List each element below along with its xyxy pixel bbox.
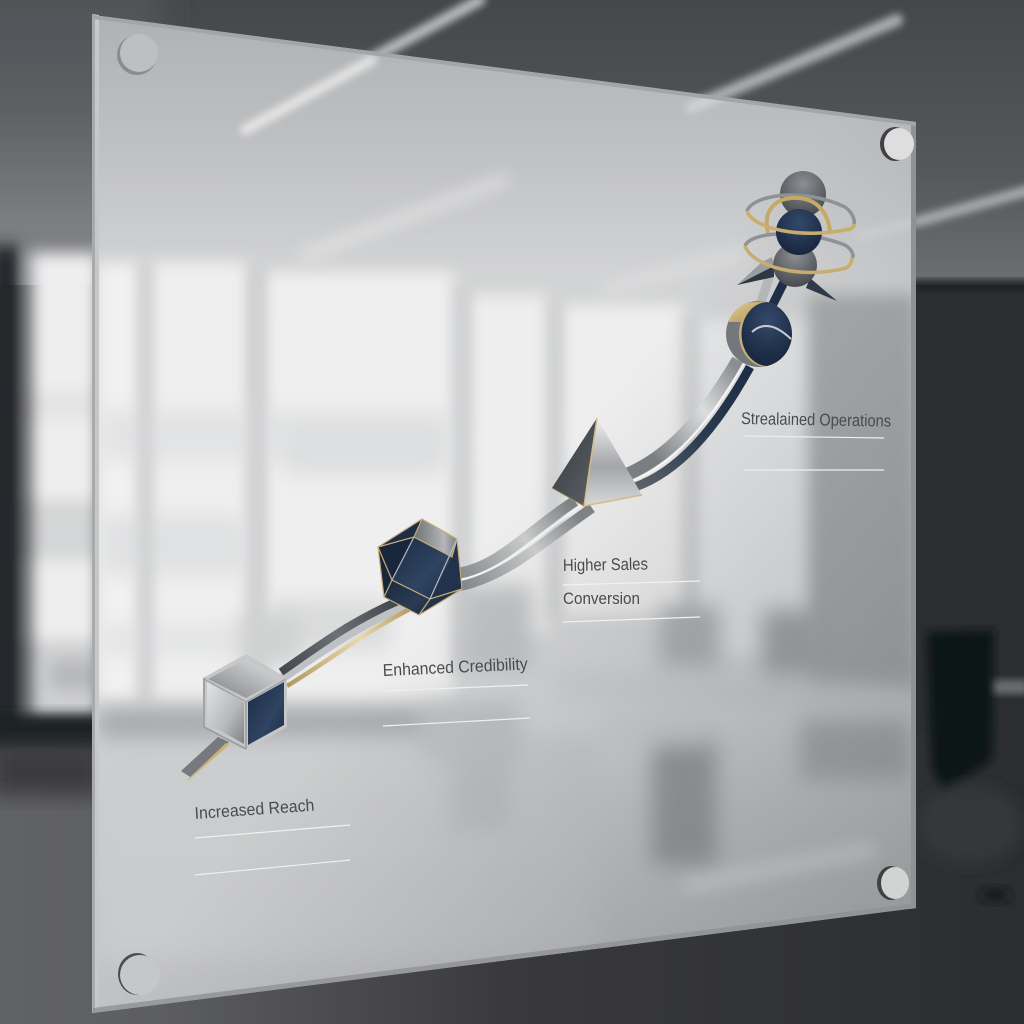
icon: pyramid xyxy=(552,418,642,506)
floor shadow and furniture xyxy=(96,585,916,958)
icon: navy polyhedron xyxy=(378,519,462,615)
screw: top left xyxy=(117,34,158,75)
label: Increased Reach: Increased Reach xyxy=(194,796,315,823)
screw: top right xyxy=(880,127,914,161)
screw: bottom right xyxy=(877,866,909,900)
back of rings xyxy=(745,234,853,258)
icon: silver cube xyxy=(203,654,287,750)
ceiling lights xyxy=(360,0,1024,222)
office chair xyxy=(918,630,1024,902)
screw: bottom left xyxy=(118,953,160,995)
label: Increased Reach xyxy=(194,796,350,875)
label: Streamlined Operations: Strealained Operations xyxy=(741,409,891,431)
ribbon segment: pyramid to sphere xyxy=(628,360,750,487)
label: Higher Sales Conversion xyxy=(563,555,700,622)
label: Enhanced Credibility: Enhanced Credibility xyxy=(382,654,528,680)
growth ribbon path xyxy=(181,275,784,781)
ribbon segment: start to cube xyxy=(181,737,229,781)
ribbon segment: cube to polyhedron xyxy=(281,601,410,686)
label: Enhanced Credibility xyxy=(382,654,530,726)
icon: orbit cluster xyxy=(737,171,854,301)
ribbon segment: polyhedron to pyramid xyxy=(460,501,592,586)
glass edge xyxy=(92,14,916,1013)
blurred office scene seen through glass xyxy=(93,15,916,1013)
light reflections xyxy=(238,54,724,137)
panel: glass board xyxy=(92,14,916,1013)
ribbon segment: sphere to cluster xyxy=(760,275,784,308)
label: Higher Sales Conversion: Conversion xyxy=(563,589,640,608)
icon: gold and navy sphere xyxy=(726,301,795,367)
label: Higher Sales Conversion: Higher Sales xyxy=(563,555,648,575)
window mullions xyxy=(139,262,698,702)
